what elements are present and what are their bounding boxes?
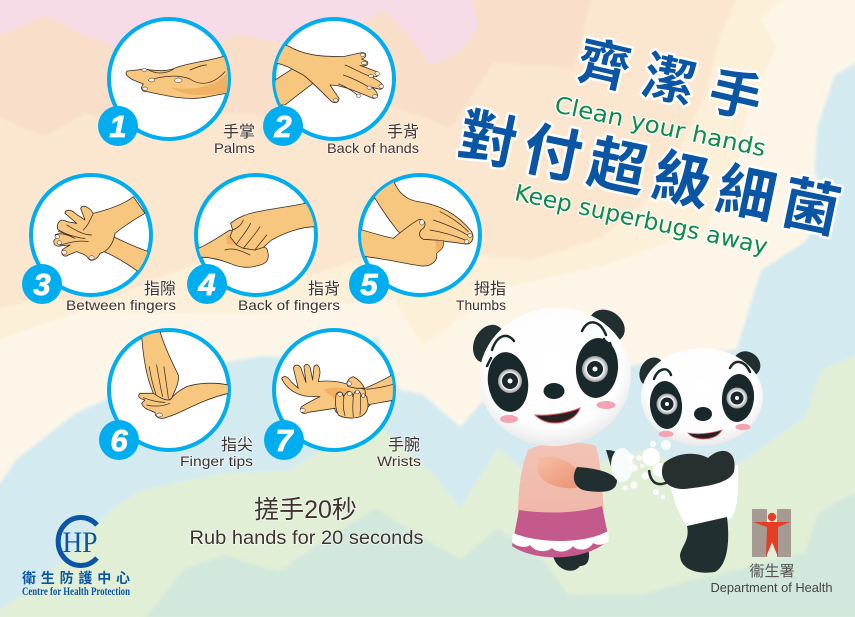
eyebrows and lashes	[487, 322, 612, 366]
caption: rub hands for 20 seconds: Rub hands for 20 seconds	[190, 527, 424, 549]
hands illustration: thumbs	[360, 180, 473, 266]
caption: rub hands for 20 seconds	[190, 496, 424, 549]
label: palms	[214, 123, 255, 156]
panda: boy washing hands	[635, 346, 765, 573]
number badge 1	[98, 106, 138, 146]
number badge 6: 6	[110, 423, 128, 458]
hands illustration: back of fingers	[197, 203, 317, 267]
label: back of hands: Back of hands	[327, 140, 419, 156]
ears	[467, 303, 631, 368]
head	[472, 300, 638, 454]
label: between fingers: Between fingers	[66, 297, 176, 313]
logo mark: CHP: HP	[62, 526, 98, 559]
number badge 6	[99, 420, 139, 460]
title line 1: Chinese: 齊潔手	[572, 32, 767, 130]
logo text: Centre for Health Protection	[22, 586, 130, 598]
logo text: Department of Health	[710, 580, 832, 595]
circle frame	[31, 175, 151, 295]
circle frame	[274, 19, 394, 139]
subtitle line 2: English: Keep superbugs away	[512, 180, 770, 260]
circle frame	[196, 175, 316, 295]
arm and hand	[537, 450, 628, 492]
logo text	[710, 563, 832, 595]
cheeks	[500, 401, 616, 423]
subtitle line 1: English: Clean your hands	[552, 92, 768, 162]
circle frame	[274, 330, 394, 450]
nose	[694, 407, 712, 421]
number badge 3	[22, 264, 62, 304]
label: thumbs: 拇指	[474, 280, 506, 298]
mouth	[688, 430, 722, 439]
caption: rub hands for 20 seconds: 搓手20秒	[254, 496, 357, 524]
number badge 7	[264, 420, 304, 460]
number badge 4: 4	[197, 267, 216, 302]
circle frame	[109, 330, 229, 450]
eye patches and eyes	[648, 373, 756, 430]
logo: Department of Health	[710, 509, 832, 595]
number badge 5	[349, 264, 389, 304]
number badge 3: 3	[33, 267, 51, 302]
step 5: thumbs	[349, 175, 506, 313]
number badge 5: 5	[360, 267, 378, 302]
number badge 2: 2	[273, 109, 292, 144]
eye patches and eyes	[484, 336, 621, 414]
label: back of fingers	[238, 280, 340, 313]
label: finger tips: Finger tips	[180, 453, 253, 469]
step 1: palms	[98, 19, 255, 156]
label: wrists: Wrists	[377, 453, 421, 469]
label: wrists: 手腕	[388, 436, 420, 454]
label: thumbs	[456, 280, 506, 313]
logo text	[22, 570, 130, 598]
logo text: 衛生防護中心	[22, 570, 130, 586]
label: back of hands: 手背	[387, 123, 419, 141]
label: finger tips	[180, 436, 253, 469]
label: palms: Palms	[214, 140, 255, 156]
step 2: back of hands	[263, 19, 419, 156]
label: thumbs: Thumbs	[456, 297, 506, 313]
arms	[662, 451, 735, 489]
hands illustration: palms	[126, 54, 230, 98]
label: back of fingers: Back of fingers	[238, 297, 340, 313]
ears	[635, 346, 765, 391]
nose	[544, 383, 564, 399]
logo: Centre for Health Protection	[22, 518, 130, 598]
feet	[553, 548, 589, 571]
hands illustration: wrists	[282, 364, 395, 418]
step 4: back of fingers	[187, 175, 340, 313]
label: back of fingers: 指背	[308, 280, 340, 298]
label: back of hands	[327, 123, 419, 156]
circle frame	[109, 19, 229, 139]
number badge 1: 1	[109, 109, 127, 144]
legs	[680, 517, 728, 573]
number badge 2	[263, 106, 303, 146]
circle frame	[360, 175, 480, 295]
logo mark: red figure	[752, 509, 791, 557]
step 6: finger tips	[99, 330, 253, 469]
label: between fingers: 指隙	[144, 280, 176, 298]
eyebrows	[654, 362, 750, 379]
shirt body	[518, 443, 604, 516]
panda: girl washing hands	[467, 300, 638, 571]
number badge 7: 7	[275, 423, 294, 458]
cheeks	[658, 424, 750, 437]
paw wrist	[649, 470, 668, 484]
hands illustration: back of hands	[273, 43, 384, 105]
label: wrists	[377, 436, 421, 469]
number badge 4	[187, 264, 227, 304]
title line 2: Chinese: 對付超級細菌	[453, 103, 846, 246]
skirt	[512, 506, 609, 557]
label: finger tips: 指尖	[221, 436, 253, 454]
label: palms: 手掌	[223, 123, 255, 141]
hands illustration: between fingers	[54, 197, 153, 277]
logo text: 衞生署	[749, 563, 795, 580]
head	[641, 348, 763, 446]
belly	[668, 465, 738, 530]
soap bubbles	[611, 440, 671, 499]
hands illustration: finger tips	[139, 332, 228, 418]
step 7: wrists	[264, 330, 421, 469]
label: between fingers	[66, 280, 176, 313]
mouth	[535, 408, 580, 423]
step 3: between fingers	[22, 175, 176, 313]
